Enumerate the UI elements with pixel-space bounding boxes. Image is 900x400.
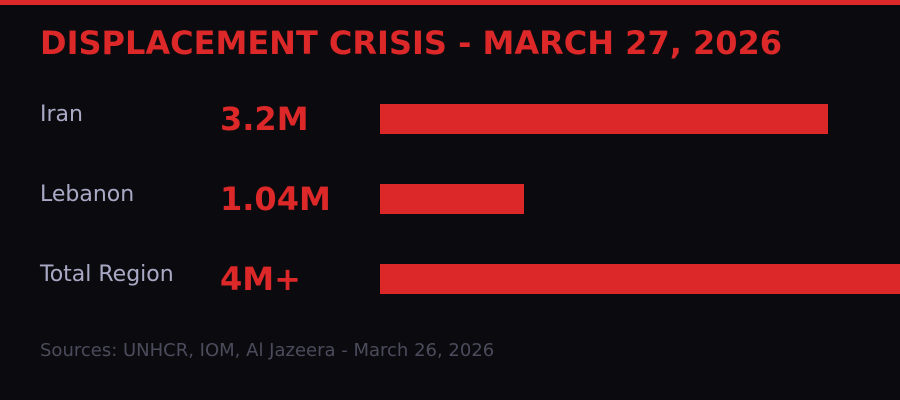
bar: Iran: [380, 104, 828, 134]
label: Iran: Iran: [40, 102, 83, 127]
label: Total Region: Total Region: [40, 262, 174, 287]
value: 3.2M: 3.2M: [220, 100, 309, 138]
row: Lebanon: [40, 180, 524, 218]
row: Total Region: [40, 260, 900, 298]
label: Lebanon: Lebanon: [40, 182, 134, 207]
sources footnote: Sources: UNHCR, IOM, Al Jazeera - March 26, 2026: [40, 340, 494, 361]
top accent bar: [0, 0, 900, 5]
row: Iran: [40, 100, 828, 138]
value: 4M+: 4M+: [220, 260, 301, 298]
title: DISPLACEMENT CRISIS - MARCH 27, 2026: [40, 24, 782, 62]
value: 1.04M: 1.04M: [220, 180, 331, 218]
bar: Total Region: [380, 264, 900, 294]
bar: Lebanon: [380, 184, 524, 214]
